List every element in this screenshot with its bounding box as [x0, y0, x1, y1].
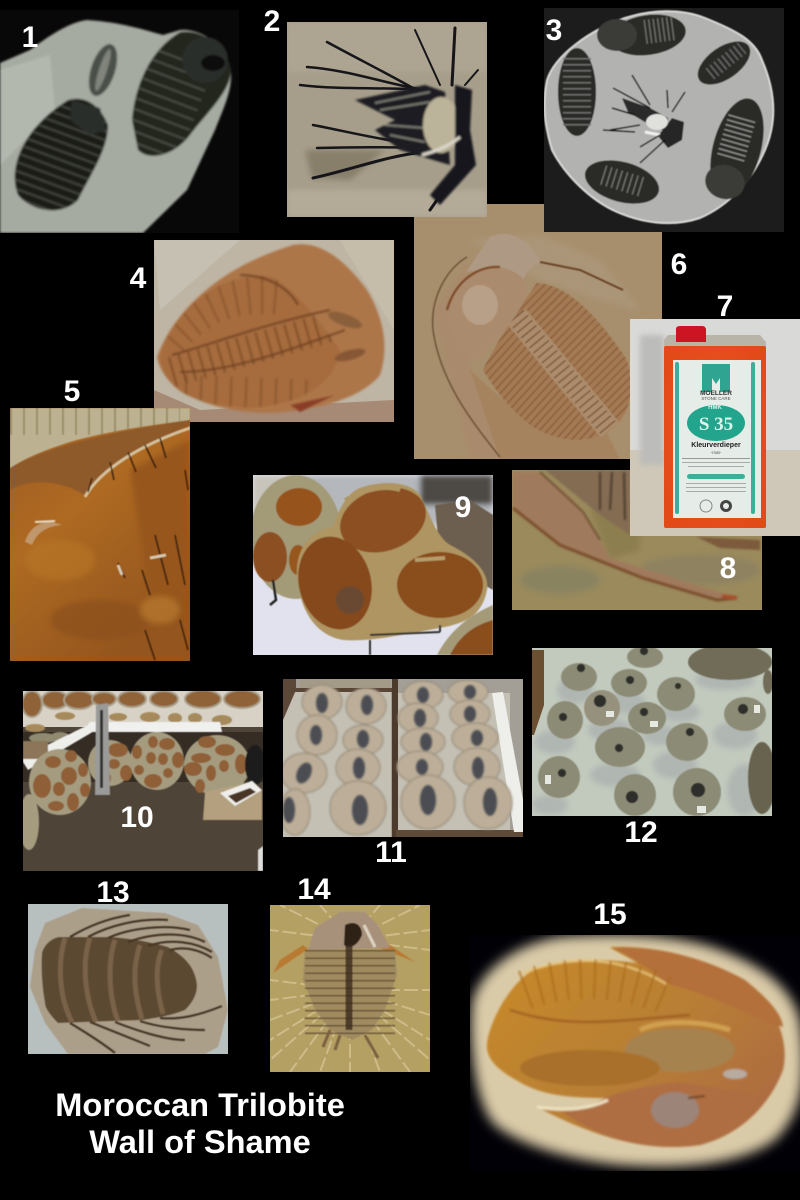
- photo 1: two dark trilobites on pale rock: [0, 10, 239, 233]
- photo 15: large orange trilobite with vignetted edges: [470, 935, 800, 1171]
- number labels: 6: [671, 248, 687, 281]
- number labels: [22, 5, 736, 931]
- number labels: 13: [96, 876, 130, 909]
- number labels: 12: [624, 816, 658, 849]
- title: [55, 1086, 345, 1160]
- number labels: 2: [264, 5, 280, 38]
- title: Wall of Shame: [89, 1123, 311, 1160]
- number labels: 9: [455, 491, 471, 524]
- photo 2: spiny black trilobite on grey-tan stone: [287, 22, 487, 217]
- can body: MOELLER: [700, 390, 732, 397]
- photo 11: trays of spiny trilobites: [280, 679, 523, 837]
- photo 3: five trilobites around a spiny one on a white disc: [544, 8, 784, 232]
- title: Moroccan Trilobite: [55, 1086, 345, 1123]
- can body: HMK: [708, 405, 722, 411]
- photo 12: spiny trilobites scattered on a table: [532, 644, 776, 816]
- Moeller logo: [702, 364, 730, 392]
- label: [673, 360, 761, 518]
- can body: -mat-: [711, 450, 722, 455]
- can body: STONE CARE: [701, 396, 731, 401]
- photo 13: brown trilobite with long spines on grey stone: [28, 904, 228, 1054]
- S 35 oval: [687, 405, 745, 441]
- photo 7: orange can of colour-deepening sealant: [630, 319, 800, 536]
- photo 10: storeroom with spotted trilobite slabs: [19, 690, 265, 871]
- number labels: 14: [297, 873, 331, 906]
- number labels: 3: [546, 14, 562, 47]
- can body: S 35: [699, 414, 733, 435]
- can body: [664, 326, 766, 528]
- photo 4: oval rust trilobite slab: [154, 240, 394, 422]
- photo 6: large brown trilobite: [414, 204, 662, 459]
- number labels: 7: [717, 290, 733, 323]
- number labels: 10: [120, 801, 154, 834]
- photo 14: small trilobite with curved genal spines on yellow matrix: [270, 905, 430, 1072]
- photo 5: close-up of rusty trilobite with spines: [10, 408, 190, 661]
- number labels: 1: [22, 21, 38, 54]
- number labels: 5: [64, 375, 80, 408]
- can body: Kleurverdieper: [691, 442, 741, 449]
- red cap: [676, 326, 706, 342]
- photo 8: close-up of a long trilobite spine: [512, 470, 762, 610]
- number labels: 15: [593, 898, 627, 931]
- number labels: 4: [130, 262, 147, 295]
- photo 9: slab with three large trilobites on a stand: [250, 475, 493, 655]
- number labels: 8: [720, 552, 736, 585]
- number labels: 11: [375, 836, 407, 869]
